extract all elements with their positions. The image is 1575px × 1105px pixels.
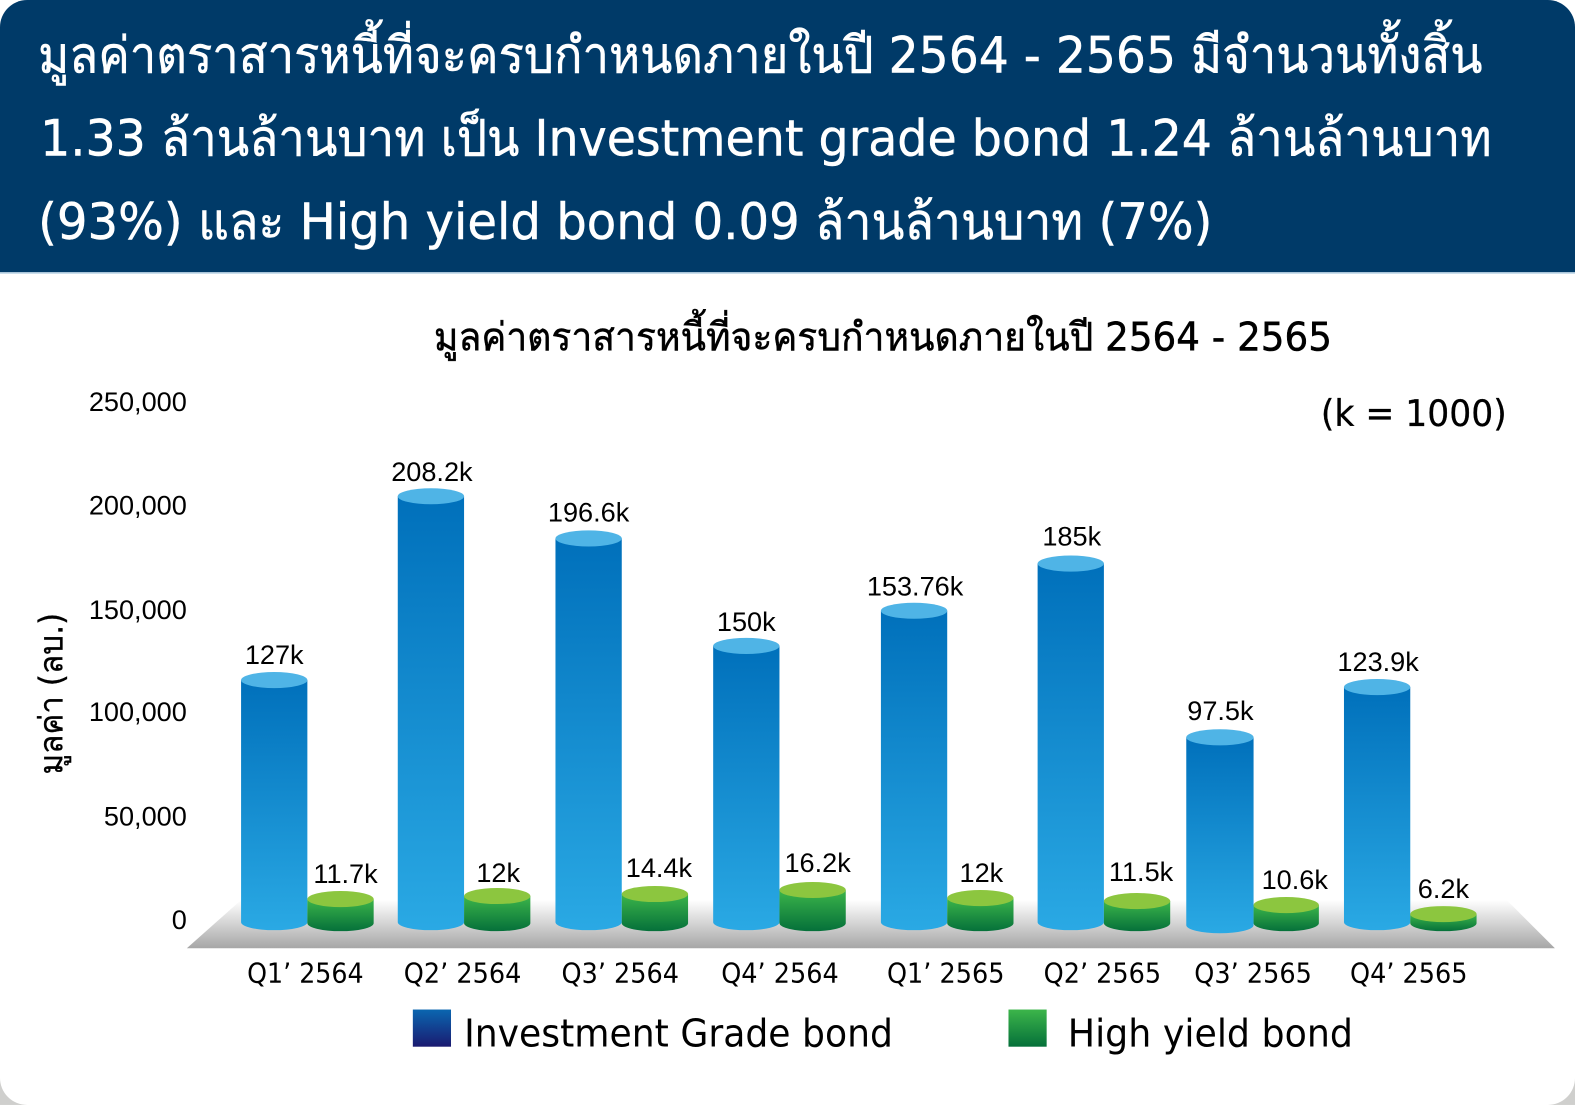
Q1 2565 bars: 153.76k bbox=[867, 571, 964, 602]
Q2 2564 bars bbox=[391, 456, 530, 931]
x axis labels: Q3’ 2565 bbox=[1194, 958, 1312, 989]
Q4 2564 bars: 16.2k bbox=[784, 847, 851, 878]
y axis title: มูลค่า (ลบ.) bbox=[31, 613, 71, 774]
chart floor platform bbox=[187, 900, 1555, 948]
y axis labels: 0 bbox=[172, 904, 187, 935]
Q4 2565 bars: 123.9k bbox=[1337, 646, 1419, 677]
headline line 1: มูลค่าตราสารหนี้ที่จะครบกำหนดภายในปี 2564 - 2565 มีจำนวนทั้งสิ้น bbox=[38, 19, 1483, 85]
chart title: มูลค่าตราสารหนี้ที่จะครบกำหนดภายในปี 2564 - 2565 bbox=[434, 309, 1332, 361]
x axis labels bbox=[247, 958, 1468, 989]
headline line 3: (93%) และ High yield bond 0.09 ล้านล้านบาท (7%) bbox=[38, 192, 1212, 251]
Q1 2564 bars: 127k bbox=[245, 639, 304, 670]
Q4 2564 bars bbox=[713, 606, 851, 931]
y axis labels: 200,000 bbox=[89, 489, 187, 520]
y axis labels: 250,000 bbox=[89, 386, 187, 417]
header banner bbox=[0, 0, 1575, 274]
Q1 2564 bars bbox=[241, 639, 378, 931]
Q3 2565 bars: 97.5k bbox=[1187, 695, 1254, 726]
legend: investment grade bond: Investment Grade bond bbox=[464, 1012, 893, 1056]
y axis labels: 150,000 bbox=[89, 594, 187, 625]
y axis labels: 50,000 bbox=[104, 801, 187, 832]
Q1 2564 bars: 11.7k bbox=[313, 858, 378, 889]
x axis labels: Q3’ 2564 bbox=[561, 958, 679, 989]
x axis labels: Q2’ 2565 bbox=[1044, 958, 1161, 989]
Q3 2565 bars bbox=[1186, 695, 1328, 933]
Q4 2565 bars bbox=[1337, 646, 1477, 931]
legend: high yield bond: High yield bond bbox=[1068, 1012, 1353, 1056]
Q3 2564 bars: 196.6k bbox=[548, 496, 630, 527]
Q3 2564 bars: 14.4k bbox=[626, 852, 693, 883]
Q2 2564 bars: 12k bbox=[476, 857, 521, 888]
Q4 2564 bars: 150k bbox=[717, 606, 776, 637]
Q1 2565 bars: 12k bbox=[960, 857, 1004, 888]
Q3 2564 bars bbox=[548, 496, 693, 931]
Q2 2565 bars bbox=[1038, 520, 1174, 931]
y axis labels: 100,000 bbox=[89, 696, 187, 727]
x axis labels: Q1’ 2564 bbox=[247, 958, 364, 989]
x axis labels: Q1’ 2565 bbox=[887, 958, 1004, 989]
y axis labels bbox=[89, 386, 187, 935]
Q2 2565 bars: 11.5k bbox=[1109, 856, 1174, 887]
Q1 2565 bars bbox=[867, 571, 1014, 931]
Q4 2565 bars: 6.2k bbox=[1418, 873, 1469, 904]
Q2 2565 bars: 185k bbox=[1042, 520, 1102, 551]
Q3 2565 bars: 10.6k bbox=[1262, 864, 1328, 895]
x axis labels: Q2’ 2564 bbox=[404, 958, 521, 989]
Q2 2564 bars: 208.2k bbox=[391, 456, 473, 487]
x axis labels: Q4’ 2565 bbox=[1350, 958, 1468, 989]
unit note: (k = 1000) bbox=[1321, 392, 1507, 435]
x axis labels: Q4’ 2564 bbox=[721, 958, 839, 989]
headline line 2: 1.33 ล้านล้านบาท เป็น Investment grade bond 1.24 ล้านล้านบาท bbox=[40, 109, 1492, 168]
